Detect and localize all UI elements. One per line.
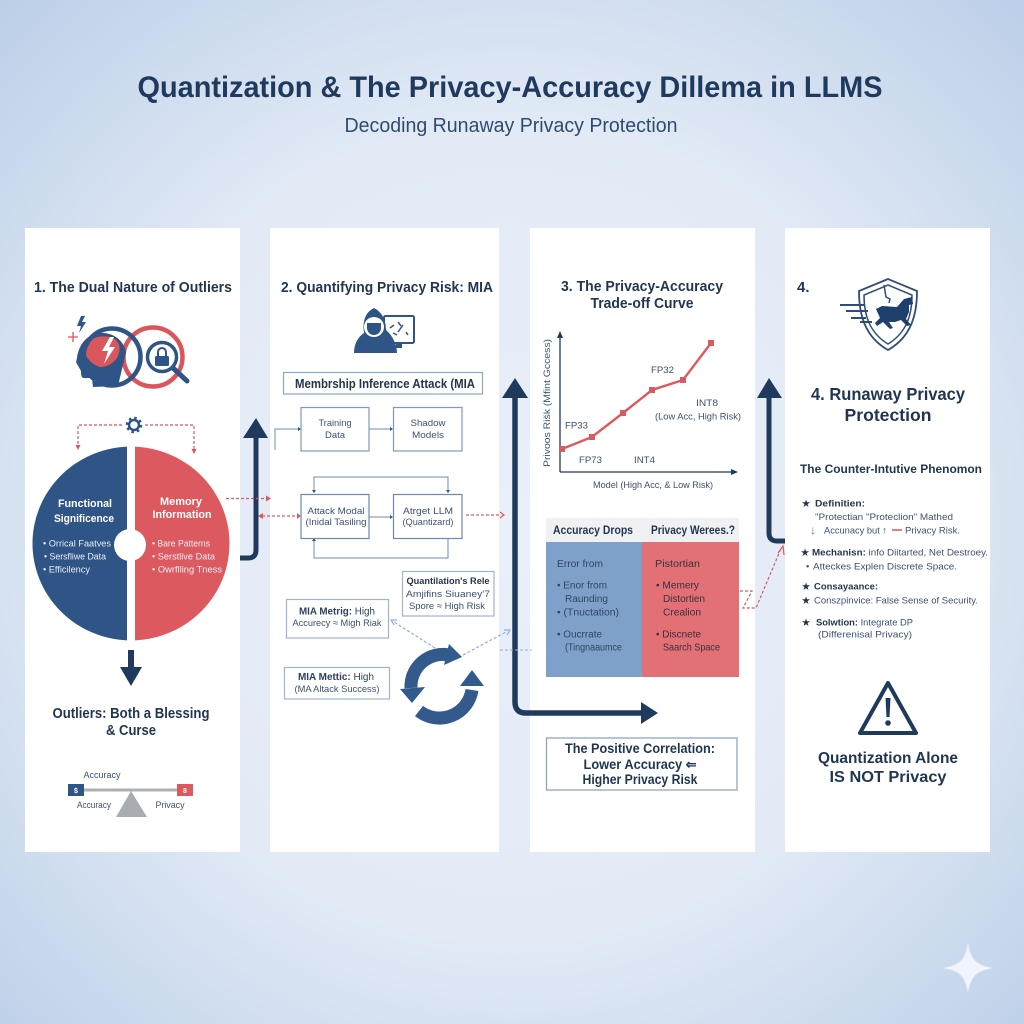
icon: balance scale: $ bbox=[74, 788, 78, 795]
icon: balance scale: Privacy bbox=[156, 800, 185, 811]
box: MIA metric 2: (MA Altack Success) bbox=[294, 684, 380, 695]
heading: panel 4: Protection bbox=[844, 405, 932, 425]
label: memory information: • Owrflling Tness bbox=[152, 564, 223, 574]
chart: line chart: INT8 bbox=[696, 398, 718, 409]
column: accuracy: Error from bbox=[557, 559, 603, 570]
box: MIA metric 1 bbox=[286, 600, 388, 638]
box: quantization role: Spore ≈ High Risk bbox=[409, 601, 485, 612]
chart: line chart: FP73 bbox=[579, 455, 602, 466]
box: quantization role: Quantilation's Rele bbox=[406, 576, 490, 587]
title: Quantization & The Privacy-Accuracy Dillema in LLMS bbox=[138, 71, 882, 104]
box: shadow models bbox=[394, 408, 462, 451]
list: consequence: Consayaance: bbox=[814, 582, 878, 592]
column: privacy: • Discnete bbox=[656, 630, 701, 640]
column: accuracy: • (Tnuctation) bbox=[557, 608, 619, 618]
heading: panel 4: 4. Runaway Privacy bbox=[811, 384, 965, 404]
icon: balance scale: Accuracy bbox=[77, 800, 111, 811]
label: memory information: Memory bbox=[160, 496, 203, 508]
icon: sparkle watermark bbox=[943, 943, 993, 993]
heading: panel 1: 1. The Dual Nature of Outliers bbox=[34, 280, 232, 296]
label: memory information bbox=[152, 496, 223, 574]
box: positive correlation: Lower Accuracy ⇐ bbox=[584, 757, 697, 772]
arrow: dashed blue tail bbox=[500, 649, 532, 651]
chart: line chart: (Low Acc, High Risk) bbox=[655, 412, 741, 422]
list: solution bbox=[802, 618, 913, 640]
panel: 3 trade-off curve bbox=[530, 228, 755, 852]
icon: shield with running horse bbox=[840, 279, 917, 350]
chart: line chart: FP33 bbox=[565, 420, 588, 432]
text: blessing and curse: & Curse bbox=[106, 723, 156, 739]
column: privacy: Distortien bbox=[663, 594, 705, 605]
label: memory information: • Serstlive Data bbox=[152, 552, 215, 562]
column: accuracy: • Enor from bbox=[557, 580, 607, 592]
list: definition: Definitien: bbox=[815, 498, 865, 510]
list: mechanism: • bbox=[806, 562, 809, 572]
box: training data: Data bbox=[325, 430, 346, 441]
chart: line chart bbox=[542, 331, 741, 491]
box: training data: Training bbox=[318, 418, 352, 429]
arrow: panel 3 to panel 4 bbox=[757, 378, 785, 541]
table: accuracy vs privacy: Accuracy Drops bbox=[553, 525, 633, 537]
panel: 2 quantifying privacy risk bbox=[270, 228, 510, 852]
box: training data bbox=[301, 408, 369, 451]
text: blessing and curse: Outliers: Both a Blessing bbox=[52, 706, 210, 722]
box: membership inference attack bbox=[284, 372, 482, 394]
box: MIA metric 2 bbox=[284, 668, 390, 699]
column: accuracy: • Oucrrate bbox=[557, 630, 602, 640]
box: target llm: Atrget LLM bbox=[403, 506, 453, 517]
column: privacy: Saarch Space bbox=[663, 642, 720, 654]
chart: split circle bbox=[32, 447, 230, 640]
box: MIA metric 1: Accurecy ≈ Migh Riak bbox=[292, 618, 382, 629]
arrow: down bbox=[120, 650, 142, 686]
list: definition bbox=[802, 498, 960, 537]
panel: 4 runaway privacy protection bbox=[785, 228, 990, 852]
box: positive correlation: Higher Privacy Risk bbox=[582, 772, 698, 787]
list: consequence: ★ bbox=[802, 596, 811, 606]
box: MIA metric 2: MIA Mettic: High bbox=[298, 672, 374, 683]
heading: panel 3: Trade-off Curve bbox=[590, 296, 694, 312]
heading: panel 3: 3. The Privacy-Accuracy bbox=[561, 279, 723, 295]
label: memory information: Information bbox=[152, 509, 212, 521]
heading: number 4: 4. bbox=[797, 279, 810, 296]
subheading: counter-intuitive: The Counter-Intutive Phenomon bbox=[800, 462, 982, 476]
subtitle: Decoding Runaway Privacy Protection bbox=[344, 115, 678, 137]
text: quantization alone is not privacy: IS NOT Privacy bbox=[830, 769, 947, 786]
box: MIA metric 1: MIA Metrig: High bbox=[299, 606, 375, 618]
arrows: dashed red connectors bbox=[226, 496, 784, 608]
heading: panel 2: 2. Quantifying Privacy Risk: MIA bbox=[281, 280, 493, 296]
box: shadow models: Shadow bbox=[410, 418, 446, 429]
icon: brain and lock bbox=[68, 316, 187, 387]
icon: warning triangle bbox=[860, 683, 916, 733]
box: attack model bbox=[301, 494, 369, 538]
list: mechanism: Atteckes Explen Discrete Space. bbox=[813, 562, 957, 572]
list: mechanism: Mechanisn: info Diitarted, Net Destroey. bbox=[812, 548, 988, 558]
arrow: panel 2 to panel 3 bbox=[502, 378, 658, 724]
box: quantization role bbox=[402, 572, 494, 616]
text: blessing and curse bbox=[52, 706, 210, 739]
label: functional significance: • Sersfliwe Data bbox=[44, 552, 106, 562]
icon: balance scale bbox=[68, 770, 193, 817]
box: positive correlation bbox=[546, 738, 737, 790]
box: quantization role: Amjifins Siuaney'7 bbox=[406, 589, 490, 600]
box: target llm bbox=[394, 494, 462, 538]
icon: balance scale: Accuracy bbox=[84, 770, 121, 781]
box: attack model: Attack Modal bbox=[308, 506, 364, 517]
list: definition: ★ bbox=[802, 498, 811, 508]
icon: balance scale: 8 bbox=[183, 788, 187, 795]
list: definition: "Protectian "Proteclion" Mathed bbox=[815, 512, 953, 523]
list: definition: Privacy Risk. bbox=[905, 526, 960, 536]
box: shadow models: Models bbox=[412, 430, 444, 441]
label: functional significance bbox=[43, 498, 114, 574]
column: privacy bbox=[655, 559, 720, 654]
text: quantization alone is not privacy bbox=[818, 750, 958, 786]
list: solution: ★ bbox=[802, 618, 811, 628]
icon: cycle arrows bbox=[400, 644, 484, 718]
list: definition: Accunacy but ↑ bbox=[824, 526, 887, 536]
table: accuracy vs privacy: Privacy Werees.? bbox=[651, 525, 735, 537]
heading: panel 3 bbox=[561, 279, 723, 312]
box: target llm: (Quantizard) bbox=[402, 517, 454, 528]
column: privacy: Crealion bbox=[663, 608, 701, 618]
icon: gear with dashed red arrows bbox=[76, 418, 196, 454]
list: solution: Solwtion: Integrate DP bbox=[816, 618, 913, 628]
label: functional significance: Significence bbox=[54, 513, 114, 525]
chart: line chart: Model (High Acc, & Low Risk) bbox=[593, 480, 713, 491]
flow: connectors bbox=[275, 427, 450, 558]
label: functional significance: • Efficilency bbox=[43, 564, 90, 574]
table: accuracy vs privacy bbox=[546, 518, 739, 677]
list: mechanism bbox=[801, 548, 988, 572]
text: quantization alone is not privacy: Quantization Alone bbox=[818, 750, 958, 767]
list: definition: ↓ bbox=[810, 523, 816, 537]
column: privacy: Pistortian bbox=[655, 559, 700, 570]
chart: line chart: FP32 bbox=[651, 365, 674, 376]
list: solution: (Differenisal Privacy) bbox=[818, 630, 912, 640]
heading: panel 4 bbox=[811, 384, 965, 425]
column: accuracy: Raunding bbox=[565, 594, 608, 605]
column: privacy: • Memery bbox=[656, 580, 699, 592]
box: membership inference attack: Membrship Inference Attack (MIA bbox=[295, 377, 475, 391]
column: accuracy: (Tingnaaumce bbox=[565, 642, 622, 654]
icon: hooded attacker at monitor bbox=[354, 308, 414, 353]
label: functional significance: • Orrical Faatves bbox=[43, 538, 112, 548]
panel: 1 dual nature of outliers bbox=[25, 228, 240, 852]
chart: line chart: INT4 bbox=[634, 455, 655, 466]
column: accuracy bbox=[557, 559, 622, 654]
arrows: dashed blue connectors bbox=[391, 620, 510, 655]
label: memory information: • Bare Patterns bbox=[152, 538, 210, 548]
list: consequence: Conszpinvice: False Sense of Security. bbox=[814, 596, 978, 606]
chart: line chart: Privoos Rišk (Mfint Gccess) bbox=[542, 339, 553, 467]
box: positive correlation: The Positive Correlation: bbox=[565, 741, 715, 756]
list: consequence bbox=[802, 582, 978, 606]
label: functional significance: Functional bbox=[58, 498, 112, 510]
arrow: panel 1 to panel 2 bbox=[240, 418, 268, 558]
box: attack model: (Inidal Tasiling bbox=[306, 517, 366, 528]
list: consequence: ★ bbox=[802, 582, 811, 592]
list: mechanism: ★ bbox=[801, 548, 810, 558]
